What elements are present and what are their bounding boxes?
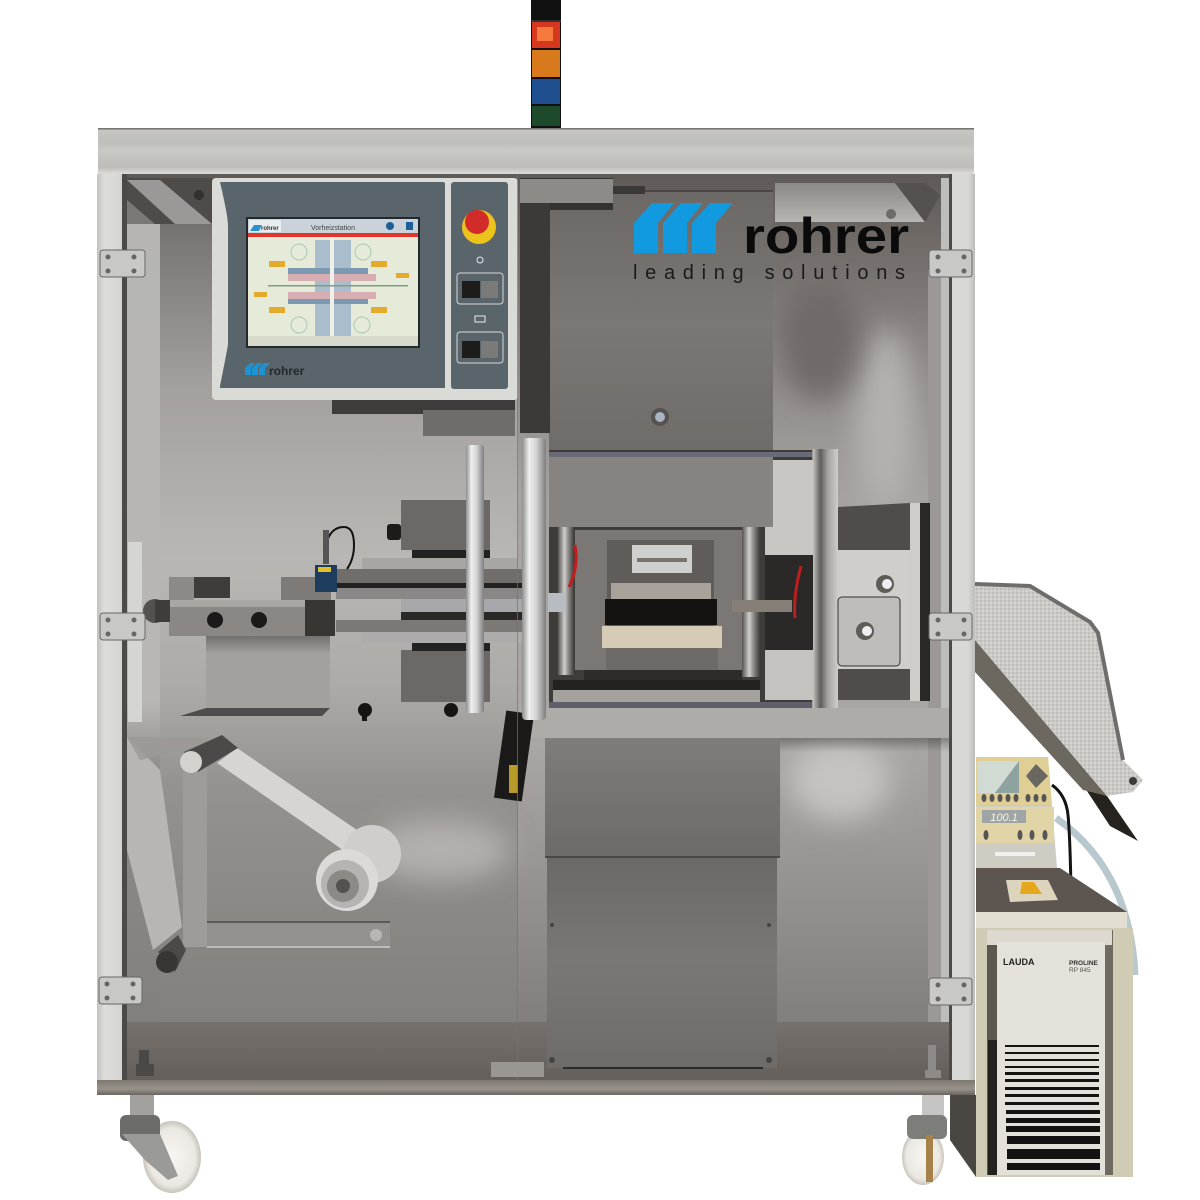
clamp block [169, 600, 305, 636]
lower shelf [520, 708, 949, 752]
vertical handles [466, 438, 546, 720]
panel logo: rohrer [269, 364, 305, 378]
touch screen: Vorheizstation [311, 225, 355, 232]
upper press block [549, 457, 773, 527]
grey bezel right [451, 182, 508, 389]
panel mount [332, 400, 515, 436]
caster right [902, 1095, 947, 1185]
right press bar [813, 449, 838, 709]
lower central panels [545, 738, 780, 1069]
center floor hinge [491, 1062, 544, 1077]
thermostat controller: 100.1 [990, 812, 1018, 824]
small clamp [548, 593, 565, 612]
guide posts [558, 527, 574, 675]
control panel [212, 178, 518, 400]
tool head [607, 540, 714, 632]
LAUDA cooling unit [976, 928, 1133, 1177]
sensor with cable [315, 527, 354, 592]
machine frame [97, 128, 975, 1095]
stack light [531, 0, 561, 128]
LAUDA cooling unit: PROLINE [1069, 960, 1099, 967]
cabinet side shadow [950, 1095, 976, 1177]
hose [1056, 818, 1135, 975]
touch screen: rohrer [261, 226, 279, 232]
chamber back walls [575, 530, 745, 670]
film web path [127, 737, 384, 950]
cabinet back wall [122, 175, 950, 1025]
top sensor housing [520, 178, 645, 433]
logo rohrer [633, 203, 909, 284]
left web guide mechanism [143, 500, 534, 802]
thermostat controller [976, 757, 1071, 890]
base plate [584, 670, 742, 680]
power switch [457, 257, 503, 304]
logo rohrer: leading solutions [633, 262, 905, 284]
cabinet floor [122, 1022, 950, 1080]
press chamber [548, 450, 815, 708]
cream insulation plate [602, 626, 722, 648]
caster left [120, 1095, 201, 1193]
right side bracket [732, 600, 792, 612]
touch screen [246, 217, 420, 348]
right side block [838, 503, 930, 701]
knobs [358, 703, 372, 717]
hinges left [99, 250, 145, 1004]
film reel [316, 825, 401, 911]
black tag [494, 710, 534, 802]
lower idler roller [156, 935, 186, 973]
grey bezel left [220, 182, 445, 388]
emergency stop [462, 210, 496, 244]
bracket under block [206, 636, 330, 708]
upper idler roller [180, 735, 238, 773]
chute [975, 583, 1143, 841]
logo rohrer: rohrer [743, 208, 909, 264]
vertical bar and lower guide bars [183, 763, 390, 948]
LAUDA cooling unit: LAUDA [1003, 957, 1035, 967]
bath deck [976, 868, 1127, 928]
hinges right [929, 250, 972, 1005]
LAUDA cooling unit: RP 845 [1069, 967, 1091, 974]
upper central panel [549, 190, 773, 458]
key switch [457, 316, 503, 363]
panel logo [245, 363, 305, 378]
